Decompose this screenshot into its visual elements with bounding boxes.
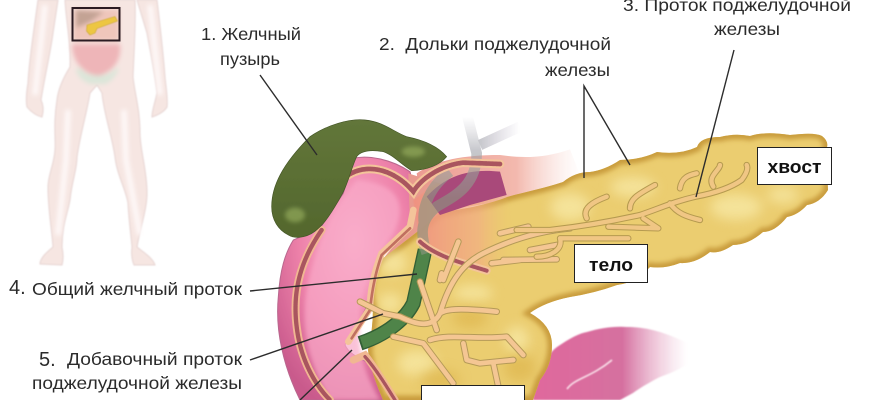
body highlights [35,5,160,235]
duct outline [517,165,747,257]
pointer lines [250,50,734,400]
line to common bile duct [250,274,417,291]
text: accessory duct second line: поджелудочной железы [32,373,242,393]
pancreas rim shading [368,133,828,400]
loop highlight [567,360,612,389]
label: tail: хвост [768,157,822,177]
lower pink intestine loop [533,327,696,400]
text: number 4: 4. [9,277,26,299]
lines to pancreas lobes [584,86,630,178]
line to accessory duct [250,314,383,360]
text: lobes: 2. Дольки поджелудочной [379,34,611,54]
duodenum light fold [305,180,400,400]
line to gallbladder [260,75,317,155]
pancreas darker patches [420,308,536,390]
ducts and walls of the head region [272,113,570,400]
label: head [422,386,524,400]
stomach and duodenum behind the pancreas [278,149,583,400]
duct fill [517,165,747,257]
pancreas body and tail ducts [517,165,747,257]
translucent grey ducts [422,113,520,253]
stomach top membrane [417,149,583,213]
wall bands [296,163,500,400]
icon: small pancreas [86,16,118,35]
gallbladder [272,120,447,237]
pancreatic duct tree outline [360,227,570,387]
text: pancreatic duct second line: железы [714,19,780,39]
duodenum body [278,157,417,400]
locator box [72,8,120,40]
illustration: duodenum, gallbladder and pancreas [272,113,840,400]
body silhouette [26,0,167,265]
pancreas shape [360,130,840,400]
gap filler between duodenum and stomach [383,173,440,258]
stomach inner dark opening [427,171,507,215]
common bile duct colour [362,250,425,343]
label: body [574,244,648,282]
text: common bile duct: Общий желчный проток [32,279,242,299]
pancreatic duct tree [360,227,570,387]
text: accessory duct: Добавочный проток [67,349,242,369]
pancreas mottled highlights [378,177,799,376]
text: gallbladder: 1. Желчный [201,24,301,44]
abdominal organs [72,9,120,84]
human body figure [26,0,167,265]
gallbladder highlights [285,146,425,222]
line to pancreatic duct [696,50,734,197]
text: number 5: 5. [39,349,56,371]
bile duct outline [360,250,425,343]
line to lower structure [300,350,352,400]
label: body: тело [589,255,633,275]
salmon stomach wall [413,183,513,270]
text: gallbladder second line: пузырь [220,49,280,69]
label: tail [758,148,832,184]
text: lobes second line: железы [545,60,610,80]
